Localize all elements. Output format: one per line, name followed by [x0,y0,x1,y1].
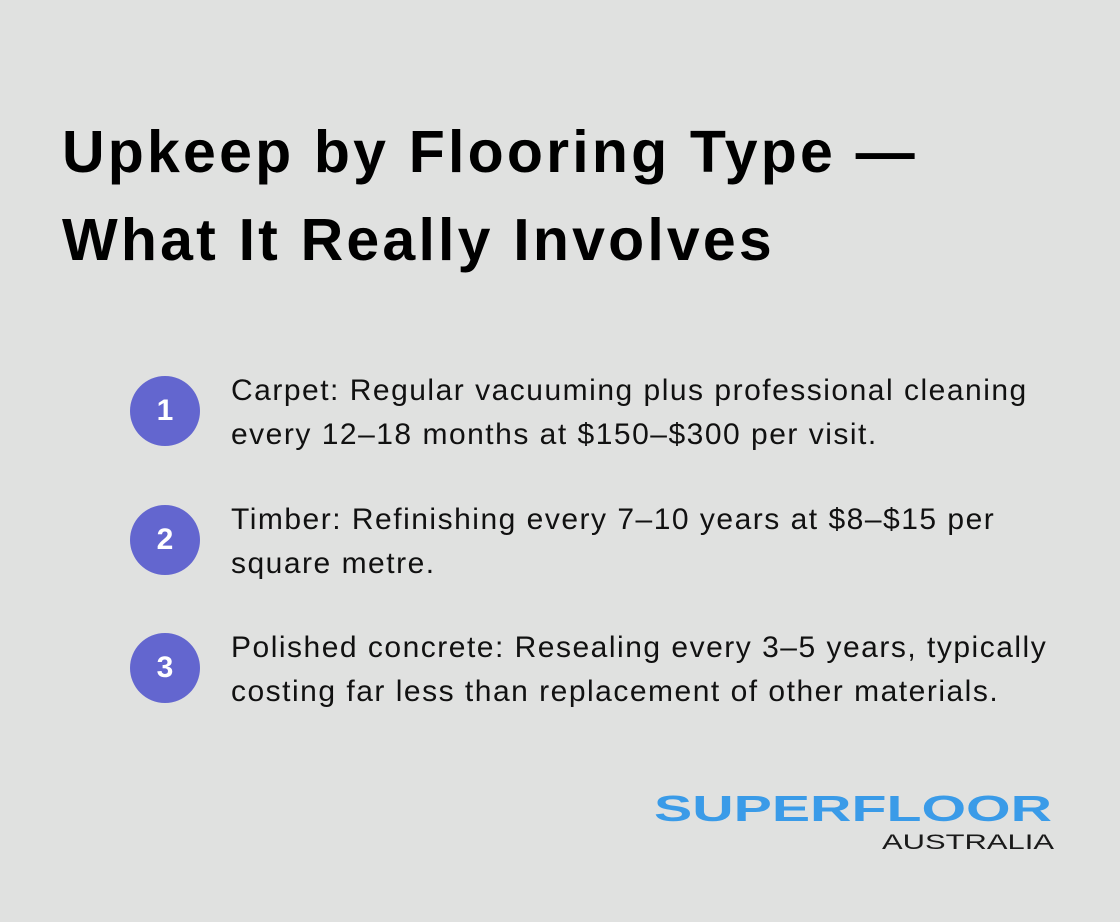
text 1: Carpet: Regular vacuuming plus professional cleaning [231,374,1028,407]
title: What It Really Involves [62,207,775,273]
text 2: square metre. [231,547,436,580]
logo [654,792,1054,852]
text 2: Timber: Refinishing every 7–10 years at $8–$15 per [231,503,995,536]
title: Upkeep by Flooring Type — [62,119,918,185]
number badge 3: 3 [157,651,173,684]
number badge 3 [130,633,200,703]
text 1: every 12–18 months at $150–$300 per visit. [231,418,878,451]
text 2 [231,503,995,580]
item 3 [130,631,1047,708]
text 3: Polished concrete: Resealing every 3–5 years, typically [231,631,1047,664]
item 2 [130,503,995,580]
text 3: costing far less than replacement of other materials. [231,675,999,708]
item 1 [130,374,1028,451]
number badge 1 [130,376,200,446]
title [62,119,918,273]
text 1 [231,374,1028,451]
number badge 2 [130,505,200,575]
number badge 1: 1 [157,394,173,427]
text 3 [231,631,1047,708]
number badge 2: 2 [157,523,173,556]
